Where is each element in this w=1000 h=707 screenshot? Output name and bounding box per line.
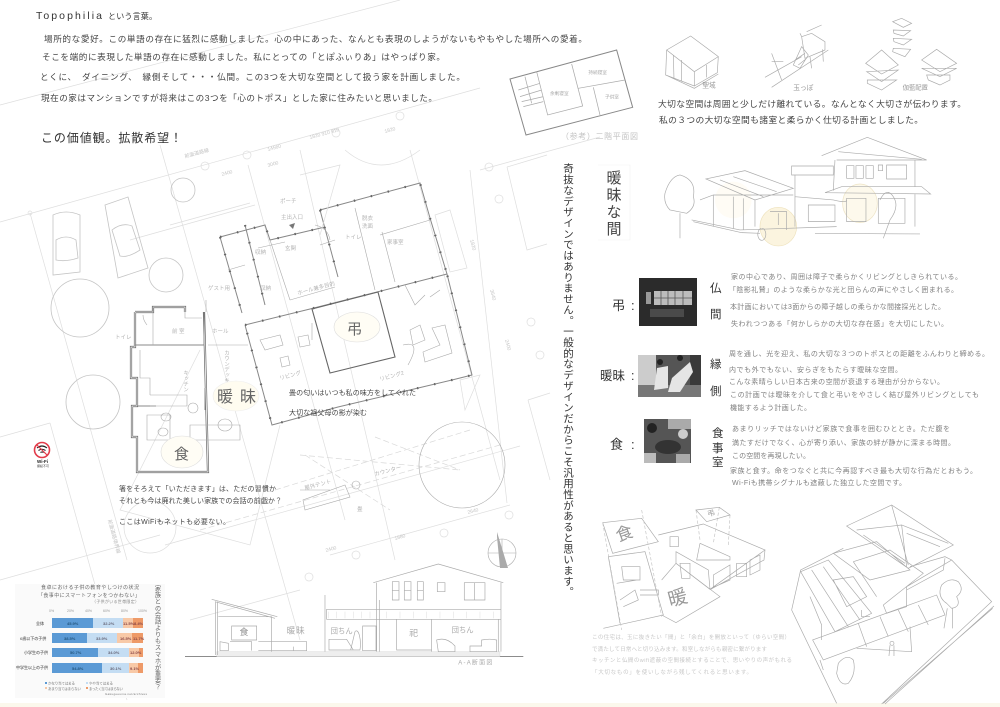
site plan base lines: 14560 — [267, 143, 282, 153]
sketch: approach — [765, 25, 828, 92]
smartphone survey chart — [15, 584, 165, 698]
site plan base lines: 3640 — [488, 289, 497, 301]
label: vertical 縁側: 縁 — [710, 357, 722, 371]
chart side question: 家族との会話よりもスマホが重要？ — [154, 584, 161, 690]
cars — [53, 197, 148, 278]
section: dining row — [610, 419, 977, 487]
main house plan: リビング2 — [378, 369, 405, 383]
bar rows: 54.8% — [72, 666, 84, 671]
kitchen wing plan: ゲスト用 — [208, 284, 230, 292]
section drawing: 食 — [240, 627, 249, 637]
label: 食: 食 — [610, 437, 623, 452]
second floor plan caption: （参考）二階平面図 — [561, 131, 638, 141]
text: dining description: Wi-Fiも携帯シグナルも遮蔽した独立した空間です。 — [732, 478, 906, 487]
axis labels: 100% — [138, 609, 147, 613]
section: engawa row — [600, 349, 989, 412]
chart legend: やや当てはまる — [89, 680, 113, 686]
bar rows: 12.0% — [130, 650, 142, 655]
label: 曖昧: 暖昧 — [600, 369, 625, 383]
label: vertical 仏間 — [710, 282, 722, 321]
section drawing: A-A断面図 — [458, 659, 492, 667]
main house plan: ホール兼多目的 — [296, 279, 336, 297]
intro text: 場所的な愛好。この単語の存在に猛烈に感動しました。心の中にあった、なんとも表現のしようがないもやもやした場所への愛着。 — [44, 33, 587, 44]
axis labels — [49, 609, 147, 613]
site plan base lines: 1820 910 910 — [309, 127, 340, 141]
elevation sketch — [665, 137, 931, 246]
intro heading: Topophilia — [36, 10, 102, 22]
text: dining description — [730, 424, 977, 487]
site plan base lines: 前面道路線 — [184, 147, 210, 160]
bar rows: 9.1% — [130, 666, 140, 671]
text: butsuma description: 家の中心であり、周囲は障子で柔らかくリビングとしきられている。 — [731, 272, 962, 281]
label: vertical 縁側 — [710, 357, 722, 398]
heading: ambiguous space — [598, 165, 630, 240]
icon: north arrow — [488, 532, 516, 568]
isometric diagram: 食 — [613, 522, 636, 545]
kitchen wing plan: トイレ — [115, 335, 132, 341]
isometric diagram: 暖 — [666, 585, 690, 611]
second floor plan — [510, 50, 633, 135]
site plan base lines: 3000 — [267, 160, 279, 169]
sketch: temple layout — [866, 18, 957, 91]
axis labels: 60% — [103, 609, 110, 613]
section drawing — [185, 564, 523, 667]
text: dining description: 家族と食す。命をつなぐと共に今再認すべき最も大切な行為だとおもう。 — [730, 466, 977, 475]
main house plan: 畳 — [357, 506, 363, 513]
second floor plan: 余剰寝室 — [550, 90, 569, 97]
section drawing: 暖昧 — [287, 624, 305, 635]
main house plan: 脱衣 — [362, 214, 374, 222]
concept sketches — [666, 18, 957, 92]
section drawing: 団ちん — [331, 626, 353, 635]
bar rows — [16, 618, 145, 673]
space marker: 弔 — [334, 312, 380, 342]
kitchen wing plan: 前 室 — [172, 327, 185, 335]
bar rows: 33.9% — [96, 636, 108, 641]
text: engawa description: こんな素晴らしい日本古来の空間が衰退する理由が分からない。 — [729, 377, 944, 386]
text: engawa description: 機能するよう計画した。 — [730, 403, 811, 412]
text: dining caption: 箸をそろえて「いただきます」は、ただの習慣か — [119, 484, 276, 493]
second floor plan: 子供室 — [605, 93, 619, 100]
icon: no wifi: 接続不可 — [37, 463, 49, 468]
heading: ambiguous space: 暖昧な間 — [604, 170, 622, 237]
main house plan: 収納 — [255, 248, 267, 256]
label: vertical 仏間: 間 — [710, 308, 722, 321]
space marker: 曖昧: 暖昧 — [217, 388, 256, 406]
second floor plan: 持続寝室 — [588, 69, 607, 76]
bird's-eye sketch — [792, 505, 994, 704]
section drawing: 祀 — [409, 628, 418, 638]
isometric diagram — [603, 507, 765, 630]
bar rows: 38.5% — [64, 636, 76, 641]
isometric caption: この住宅は、玉に抜きたい「間」と「余白」を開放といって（ゆらい空間） — [592, 633, 790, 641]
label: vertical 食事室: 室 — [712, 456, 724, 469]
bar rows: 6歳以下の子供 — [20, 635, 46, 641]
isometric diagram: 弔 — [707, 508, 716, 519]
chart title: 「食事中にスマートフォンをつかわない」 — [38, 592, 140, 599]
chart legend — [45, 680, 148, 696]
label: 弔: 弔 — [612, 298, 625, 313]
intro heading: という言葉。 — [108, 11, 157, 21]
site plan base lines: 1880 — [394, 533, 406, 542]
sketch: approach: 玉っぽ — [793, 84, 814, 92]
bar rows: 小学生の子供 — [24, 649, 48, 655]
space marker: 食 — [161, 436, 203, 468]
intro text — [40, 33, 587, 103]
label: 食: : — [631, 437, 635, 452]
kitchen wing plan: キッチン — [182, 370, 189, 392]
icon: no wifi: Wi-Fi — [37, 459, 48, 464]
bar rows: 8.4% — [134, 621, 144, 626]
site plan base lines: 2400 — [221, 169, 233, 178]
section: buddhist room row — [612, 272, 962, 328]
chart title: 食卓における子供の教育やしつけの状況 — [41, 584, 139, 591]
label: 弔: : — [631, 298, 635, 313]
intro text: そこを端的に表現した単語の存在に感動しました。私にとっての「とぽふぃりあ」はやっぱり家。 — [42, 51, 445, 62]
isometric caption: キッチンと仏間のwifi遮蔽の空間接続とすることで、思いやりの声がもれる — [592, 656, 792, 664]
bar rows: 全体 — [36, 620, 44, 626]
space marker: 食: 食 — [174, 446, 189, 463]
main house plan: 家事室 — [387, 238, 404, 246]
chart legend: あまり当てはまらない — [48, 686, 82, 691]
isometric caption: で満たして日常へと切り込みます。和室しながらも親密に繋がります — [592, 645, 767, 653]
kitchen wing plan: ホール — [212, 328, 229, 335]
intro heading — [36, 10, 157, 22]
main house plan: 玄関 — [285, 244, 297, 252]
section drawing: 団ちん — [452, 626, 474, 635]
bar rows: 50.7% — [70, 650, 82, 655]
bar rows: 45.9% — [67, 621, 79, 626]
chart title — [38, 584, 140, 604]
site plan base lines: 2400 — [325, 545, 337, 554]
chart legend: かなり当てはまる — [48, 680, 75, 686]
main house plan: リビング — [278, 368, 302, 382]
main house plan: 洗面 — [362, 222, 374, 230]
text: tatami caption: 大切な祖父母の影が染む — [289, 408, 367, 417]
main house plan: カウンター — [373, 463, 402, 478]
bar rows: 34.0% — [108, 650, 120, 655]
site plan base lines — [0, 0, 600, 700]
kitchen wing plan — [115, 284, 248, 472]
bar rows: 32.2% — [103, 621, 115, 626]
slogan: この価値観。拡散希望！ — [41, 130, 182, 145]
text: engawa description — [729, 349, 989, 412]
text: butsuma description: 失われつつある「何かしらかの大切な存在感」を大切にしたい。 — [731, 319, 948, 328]
label: vertical 縁側: 側 — [710, 385, 722, 398]
site plan base lines: 前面道路境界線 — [106, 519, 122, 554]
text: butsuma description: 「陰影礼賛」のような柔らかな光と団らんの声にやさしく囲まれる。 — [729, 285, 958, 294]
text: dining description: 満たすだけでなく、心が寄り添い、家族の絆が静かに深まる時間。 — [732, 438, 955, 447]
main house plan: 主出入口 — [281, 213, 303, 221]
bar rows: 11.5% — [123, 621, 135, 626]
text: dining caption: それとも今は廃れた美しい家族での会話の前戯か？ — [119, 496, 282, 505]
axis labels: 80% — [121, 609, 128, 613]
site plan base lines: 1820 — [468, 239, 477, 251]
sketch: sanctuary: 聖域 — [702, 80, 716, 89]
label: vertical 食事室 — [712, 427, 724, 469]
site plan base lines: 1820 — [384, 126, 396, 135]
main house plan: 屋外テント — [303, 477, 332, 492]
bar rows: 11.7% — [133, 636, 145, 641]
trees — [51, 150, 505, 553]
main house plan — [220, 165, 480, 513]
icon: no wifi — [34, 442, 50, 468]
text: engawa description: この計画では曖昧を介して食と弔いをやさしく結び屋外リビングとしても — [730, 390, 979, 399]
label: vertical 食事室: 食 — [712, 427, 724, 440]
bar rows: 30.1% — [110, 666, 122, 671]
isometric caption: 「大切なもの」を使いしながら残してくれると思います。 — [592, 668, 752, 676]
photo: butsuma — [639, 278, 697, 326]
text: tatami caption — [289, 388, 416, 417]
text: dining description: あまりリッチではないけど家族で食事を囲むひととき。ただ腹を — [732, 424, 950, 433]
axis labels: 0% — [49, 609, 54, 613]
sketch: sanctuary — [666, 36, 718, 89]
axis labels: 20% — [67, 609, 74, 613]
main house plan: トイレ — [345, 235, 362, 241]
text: engawa description: 周を通し、光を迎え、私の大切な３つのトポスとの距離をふんわりと締める。 — [729, 349, 989, 358]
text: dining description: この空間を再現したい。 — [732, 452, 810, 460]
photo: family meal — [644, 419, 691, 463]
concept text: 私の３つの大切な空間も諸室と柔らかく仕切る計画としました。 — [659, 114, 923, 125]
site plan base lines: 2400 — [503, 339, 512, 351]
chart title: （子供がいる世帯限定） — [92, 598, 139, 604]
text: tatami caption: 畳の匂いはいつも私の味方をしてくれた — [289, 388, 416, 397]
site plan base lines: 2640 — [467, 507, 479, 516]
concept text: 大切な空間は周囲と少しだけ離れている。なんとなく大切さが伝わります。 — [658, 98, 966, 109]
intro text: とくに、 ダイニング、 縁側そして・・・仏間。この3つを大切な空間として扱う家を計画しました。 — [40, 71, 465, 82]
bar rows: 中学生以上の子供 — [16, 664, 48, 670]
text: engawa description: 内でも外でもない、安らぎをもたらす曖昧な空間。 — [729, 365, 902, 374]
photo: engawa — [638, 355, 701, 397]
text: dining caption — [119, 484, 282, 526]
chart legend: まったく当てはまらない — [89, 686, 124, 691]
sketch: temple layout: 伽藍配置 — [903, 82, 929, 91]
main house plan: ポーチ — [280, 198, 297, 205]
label: vertical 仏間: 仏 — [710, 282, 722, 295]
text: dining caption: ここはWiFiもネットも必要ない。 — [119, 517, 230, 526]
text: butsuma description: 本計画においては3面からの障子越しの柔らかな間接採光とした。 — [730, 302, 945, 311]
vertical statement: 奇抜なデザインではありません。一般的なデザインだからこそ汎用性があると思います。 — [562, 162, 574, 597]
bar rows: 16.5% — [120, 636, 132, 641]
kitchen wing plan: カウンデッキ — [223, 350, 230, 383]
concept text — [658, 98, 966, 125]
text: butsuma description — [729, 272, 962, 328]
label: 曖昧: : — [631, 369, 634, 383]
label: vertical 食事室: 事 — [712, 442, 724, 455]
axis labels: 40% — [85, 609, 92, 613]
space marker: 曖昧 — [213, 381, 259, 411]
chart legend: Gakugeeuma.net/archives — [105, 692, 148, 696]
isometric caption — [592, 633, 792, 676]
intro text: 現在の家はマンションですが将来はこの3つを「心のトポス」とした家に住みたいと思いました。 — [41, 92, 437, 103]
main house plan: 収納 — [260, 284, 272, 292]
space marker: 弔: 弔 — [347, 321, 362, 338]
